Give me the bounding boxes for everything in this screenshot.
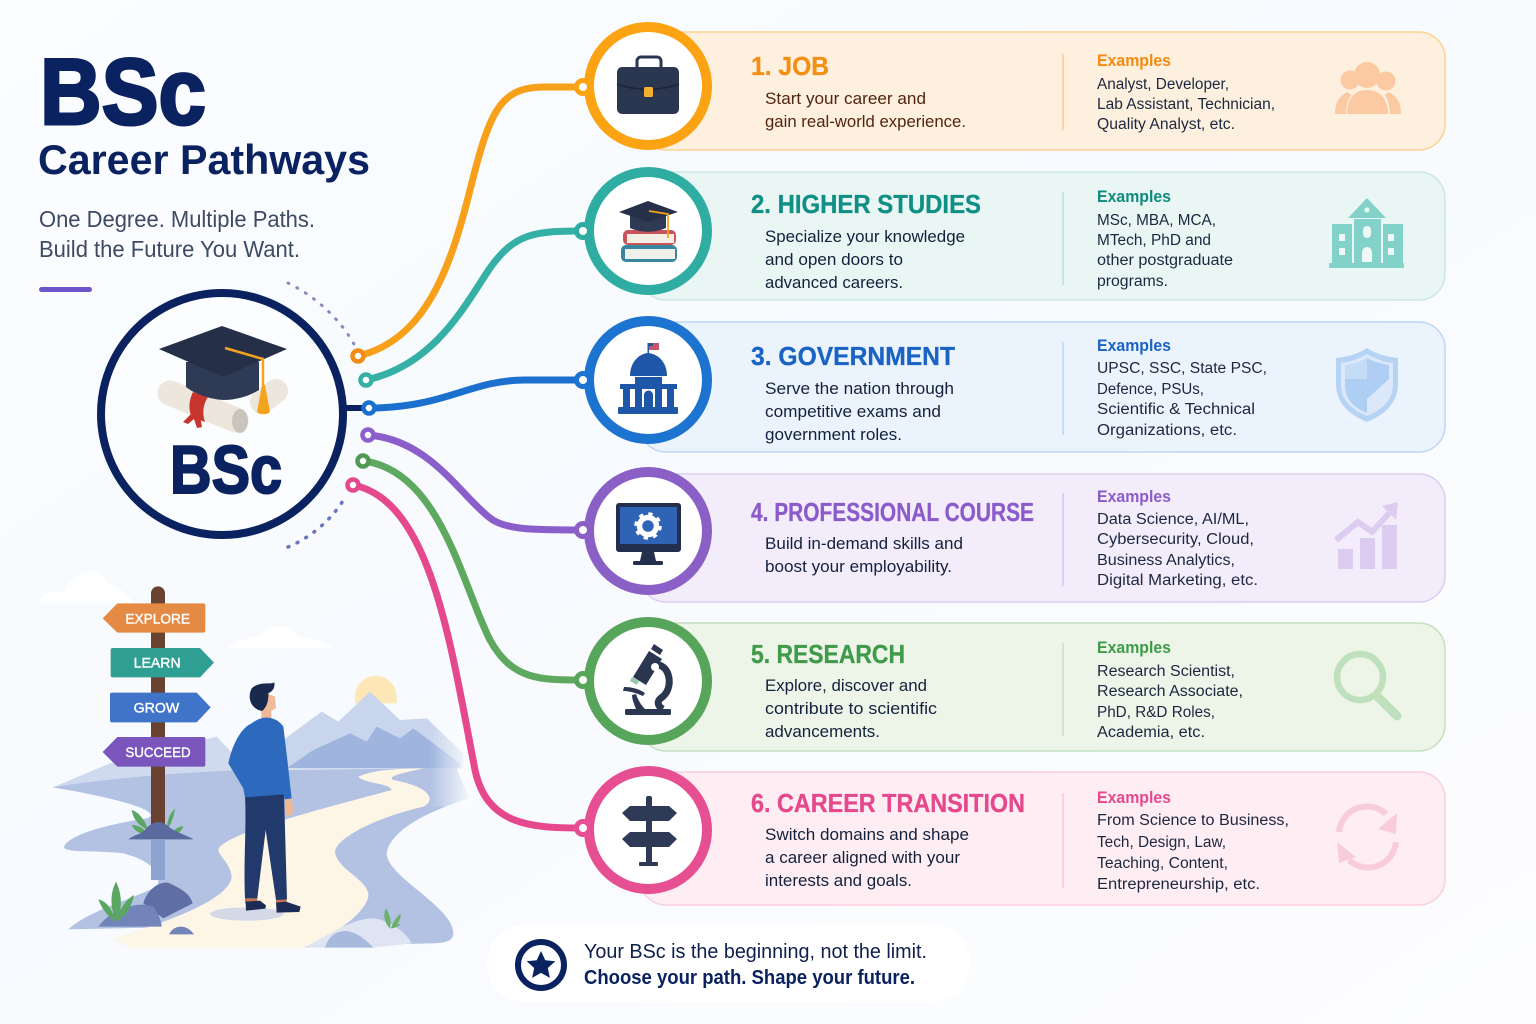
- description: [765, 227, 965, 292]
- card background: [640, 623, 1445, 751]
- examples: Quality Analyst, etc.: [1097, 116, 1235, 133]
- examples: other postgraduate: [1097, 252, 1233, 269]
- sign: grow: [110, 693, 211, 722]
- examples: MSc, MBA, MCA,: [1097, 212, 1216, 229]
- dotted arc: bottom: [288, 496, 346, 547]
- examples: Data Science, AI/ML,: [1097, 511, 1249, 528]
- panel: research: [640, 623, 1445, 751]
- pathway ring: professional course: [576, 472, 707, 590]
- icon: refresh arrows: [1337, 806, 1397, 868]
- heading: 4. PROFESSIONAL COURSE: [751, 497, 1034, 527]
- examples: [1097, 639, 1243, 741]
- examples: Scientific & Technical: [1097, 401, 1255, 418]
- post reflection: [151, 840, 165, 880]
- description: and open doors to: [765, 250, 903, 269]
- illustration: signpost and person on path: [38, 572, 473, 948]
- near mountains: [287, 727, 460, 768]
- examples: Business Analytics,: [1097, 552, 1235, 569]
- examples: From Science to Business,: [1097, 812, 1289, 829]
- connector: job: [358, 87, 582, 356]
- description: Switch domains and shape: [765, 825, 969, 844]
- wooden post: [151, 586, 165, 825]
- subtitle: One Degree. Multiple Paths.: [39, 206, 315, 232]
- examples: programs.: [1097, 273, 1168, 290]
- panel: job: [640, 32, 1445, 150]
- examples: Digital Marketing, etc.: [1097, 572, 1258, 589]
- description: advancements.: [765, 722, 880, 741]
- description: [765, 379, 954, 444]
- title: Career Pathways: [38, 136, 370, 183]
- title: BSc: [40, 39, 206, 144]
- description: advanced careers.: [765, 273, 903, 292]
- sign: learn: LEARN: [134, 655, 181, 671]
- description: Explore, discover and: [765, 676, 927, 695]
- examples: Examples: [1097, 337, 1171, 355]
- callout: closing message: Your BSc is the beginning, not the limit.: [584, 941, 927, 963]
- panel: professional course: [640, 474, 1445, 602]
- pathway ring: research: [576, 622, 707, 740]
- examples: UPSC, SSC, State PSC,: [1097, 360, 1267, 377]
- icon: shield: [1336, 348, 1398, 422]
- title: [38, 39, 370, 183]
- description: Specialize your knowledge: [765, 227, 965, 246]
- examples: [1097, 789, 1289, 893]
- icon: diploma and cap: [159, 326, 287, 433]
- icon: magnifier: [1337, 654, 1397, 716]
- icon: briefcase: [617, 57, 679, 114]
- callout: closing message: [487, 925, 970, 1002]
- card background: [640, 474, 1445, 602]
- panel: government: [640, 322, 1445, 452]
- pathway ring: higher studies: [576, 172, 707, 290]
- description: government roles.: [765, 425, 902, 444]
- heading: 1. JOB: [751, 51, 829, 81]
- examples: Examples: [1097, 188, 1171, 206]
- examples: [1097, 52, 1275, 133]
- divider: [1062, 793, 1064, 888]
- sign: grow: GROW: [134, 700, 180, 716]
- land: [53, 768, 470, 947]
- examples: Examples: [1097, 639, 1171, 657]
- description: competitive exams and: [765, 402, 941, 421]
- callout: closing message: Choose your path. Shape your future.: [584, 967, 915, 989]
- divider: [1062, 493, 1064, 586]
- divider: [1062, 54, 1064, 130]
- examples: Research Scientist,: [1097, 663, 1235, 680]
- card background: [640, 32, 1445, 150]
- fade: [430, 720, 473, 807]
- heading: 6. CAREER TRANSITION: [751, 788, 1025, 818]
- examples: Teaching, Content,: [1097, 855, 1228, 872]
- examples: Cybersecurity, Cloud,: [1097, 531, 1254, 548]
- description: contribute to scientific: [765, 699, 938, 718]
- examples: Academia, etc.: [1097, 724, 1205, 741]
- description: [765, 89, 966, 131]
- connector: government: [369, 380, 582, 408]
- heading: 2. HIGHER STUDIES: [751, 189, 981, 219]
- connector: career transition: [353, 485, 582, 828]
- description: Build in-demand skills and: [765, 534, 963, 553]
- examples: Tech, Design, Law,: [1097, 834, 1226, 851]
- examples: Examples: [1097, 789, 1171, 807]
- subtitle: [39, 206, 315, 262]
- icon: university building: [1329, 198, 1404, 268]
- description: [765, 676, 938, 741]
- icon: signpost: [622, 796, 677, 866]
- divider: [1062, 192, 1064, 285]
- hub circle: BSc: [101, 293, 364, 535]
- heading: 5. RESEARCH: [751, 639, 905, 669]
- card background: [640, 322, 1445, 452]
- examples: Analyst, Developer,: [1097, 76, 1229, 93]
- heading: 3. GOVERNMENT: [751, 341, 955, 371]
- card background: [640, 772, 1445, 905]
- examples: Entrepreneurship, etc.: [1097, 876, 1260, 893]
- card background: [640, 172, 1445, 300]
- divider: [1062, 342, 1064, 435]
- connector: research: [363, 461, 582, 680]
- description: boost your employability.: [765, 557, 952, 576]
- pathway ring: government: [576, 321, 707, 439]
- examples: [1097, 188, 1233, 290]
- sign: succeed: [103, 737, 205, 767]
- panel: higher studies: [640, 172, 1445, 300]
- far mountains: [283, 692, 463, 768]
- connector: professional course: [368, 435, 582, 530]
- examples: Lab Assistant, Technician,: [1097, 96, 1275, 113]
- sign: explore: [103, 603, 205, 633]
- examples: PhD, R&D Roles,: [1097, 704, 1215, 721]
- description: a career aligned with your: [765, 848, 960, 867]
- icon: monitor with gear: [616, 503, 681, 565]
- icon: books and cap: [619, 201, 678, 262]
- icon: people: [1335, 62, 1401, 114]
- icon: capitol building: [618, 343, 678, 414]
- accent bar: [39, 287, 92, 292]
- icon: star badge: [518, 942, 564, 988]
- sign: succeed: SUCCEED: [125, 744, 191, 760]
- examples: Defence, PSUs,: [1097, 381, 1204, 398]
- examples: MTech, PhD and: [1097, 232, 1211, 249]
- left mountains: [53, 737, 247, 787]
- hub circle: BSc: BSc: [170, 432, 282, 508]
- winding path: [113, 768, 430, 948]
- sign: learn: [111, 648, 214, 677]
- dotted arc: top: [288, 283, 356, 348]
- subtitle: Build the Future You Want.: [39, 236, 300, 262]
- icon: growth chart: [1336, 502, 1398, 569]
- pathway ring: career transition: [576, 771, 707, 889]
- description: Start your career and: [765, 89, 926, 108]
- connector: higher studies: [366, 231, 582, 380]
- divider: [1062, 643, 1064, 736]
- pathway ring: job: [576, 27, 707, 145]
- connector nodes near hub: [348, 350, 374, 490]
- examples: Examples: [1097, 488, 1171, 506]
- sign: explore: EXPLORE: [125, 611, 190, 627]
- rocks and plants foreground: [98, 882, 412, 948]
- description: [765, 825, 969, 890]
- post base rocks and plants: [128, 808, 193, 839]
- description: gain real-world experience.: [765, 112, 966, 131]
- description: Serve the nation through: [765, 379, 954, 398]
- examples: Examples: [1097, 52, 1171, 70]
- person: [210, 682, 301, 921]
- icon: microscope: [623, 644, 671, 715]
- panel: career transition: [640, 772, 1445, 905]
- clouds: [38, 572, 333, 648]
- examples: Organizations, etc.: [1097, 422, 1237, 439]
- description: interests and goals.: [765, 871, 912, 890]
- examples: [1097, 488, 1258, 589]
- sun: [355, 676, 397, 703]
- examples: Research Associate,: [1097, 683, 1243, 700]
- examples: [1097, 337, 1267, 439]
- description: [765, 534, 963, 576]
